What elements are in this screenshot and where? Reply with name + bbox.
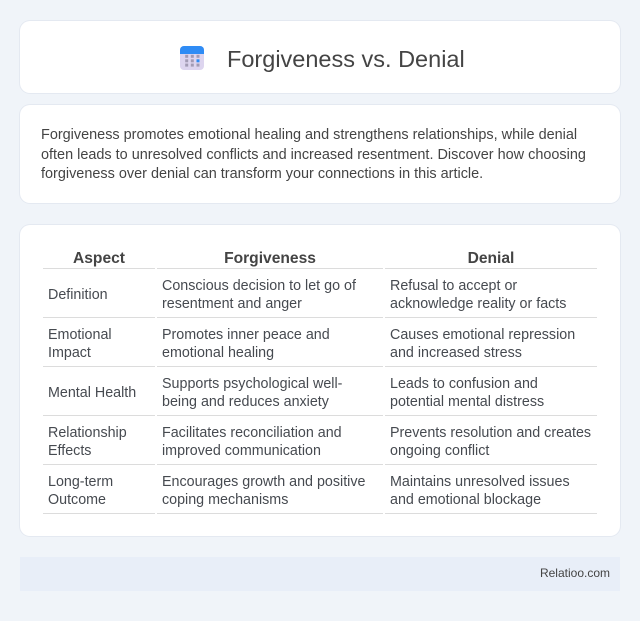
- table row: Emotional Impact: and increased stress: [390, 345, 522, 361]
- table row: Long-term Outcome: Long-term: [48, 474, 113, 490]
- table row: Mental Health: Leads to confusion and: [390, 376, 538, 392]
- table row: Mental Health: Supports psychological well-: [162, 376, 342, 392]
- table row: Relationship Effects: Relationship: [48, 425, 127, 441]
- table row: Mental Health: being and reduces anxiety: [162, 394, 329, 410]
- table card: [20, 225, 620, 536]
- footer credit: Relatioo.com: [540, 566, 610, 580]
- title: Forgiveness vs. Denial: [227, 46, 465, 72]
- table row: Long-term Outcome: Outcome: [48, 492, 106, 508]
- table row: Long-term Outcome: Encourages growth and positive: [162, 474, 365, 490]
- title card: [20, 21, 620, 93]
- table row: Emotional Impact: Emotional: [48, 327, 112, 343]
- table row: Mental Health: [43, 376, 597, 416]
- intro text: often leads to unresolved conflicts and increased resentment. Discover how choosing: [41, 146, 586, 162]
- table row: Emotional Impact: emotional healing: [162, 345, 274, 361]
- table row: Definition: Conscious decision to let go of: [162, 278, 356, 294]
- intro card: [20, 105, 620, 203]
- icon: calendar: [180, 46, 204, 70]
- intro text: forgiveness over denial can transform your connections in this article.: [41, 166, 483, 182]
- table row: Definition: resentment and anger: [162, 296, 302, 312]
- table row: Relationship Effects: Facilitates reconciliation and: [162, 425, 342, 441]
- table header: Denial: [468, 250, 514, 267]
- table row: Mental Health: Mental Health: [48, 385, 136, 401]
- footer bar: [20, 557, 620, 591]
- table row: Emotional Impact: Impact: [48, 345, 91, 361]
- table row: Long-term Outcome: [43, 474, 597, 514]
- table row: Relationship Effects: ongoing conflict: [390, 443, 489, 459]
- table row: Definition: Refusal to accept or: [390, 278, 517, 294]
- table header: Aspect: [73, 250, 125, 267]
- table row: Definition: [43, 278, 597, 318]
- table row: Relationship Effects: Prevents resolution and creates: [390, 425, 591, 441]
- table row: Mental Health: potential mental distress: [390, 394, 544, 410]
- table header: [43, 250, 597, 269]
- table row: Emotional Impact: [43, 327, 597, 367]
- intro text: [41, 127, 586, 182]
- table row: Definition: Definition: [48, 287, 108, 303]
- table row: Definition: acknowledge reality or facts: [390, 296, 566, 312]
- table row: Emotional Impact: Promotes inner peace and: [162, 327, 330, 343]
- table header: Forgiveness: [224, 250, 316, 267]
- table row: Long-term Outcome: coping mechanisms: [162, 492, 288, 508]
- table row: Long-term Outcome: and emotional blockage: [390, 492, 541, 508]
- table row: Relationship Effects: Effects: [48, 443, 91, 459]
- intro text: Forgiveness promotes emotional healing and strengthens relationships, while denial: [41, 127, 577, 143]
- table row: Relationship Effects: improved communication: [162, 443, 321, 459]
- table row: Emotional Impact: Causes emotional repression: [390, 327, 575, 343]
- table row: Relationship Effects: [43, 425, 597, 465]
- table row: Long-term Outcome: Maintains unresolved issues: [390, 474, 570, 490]
